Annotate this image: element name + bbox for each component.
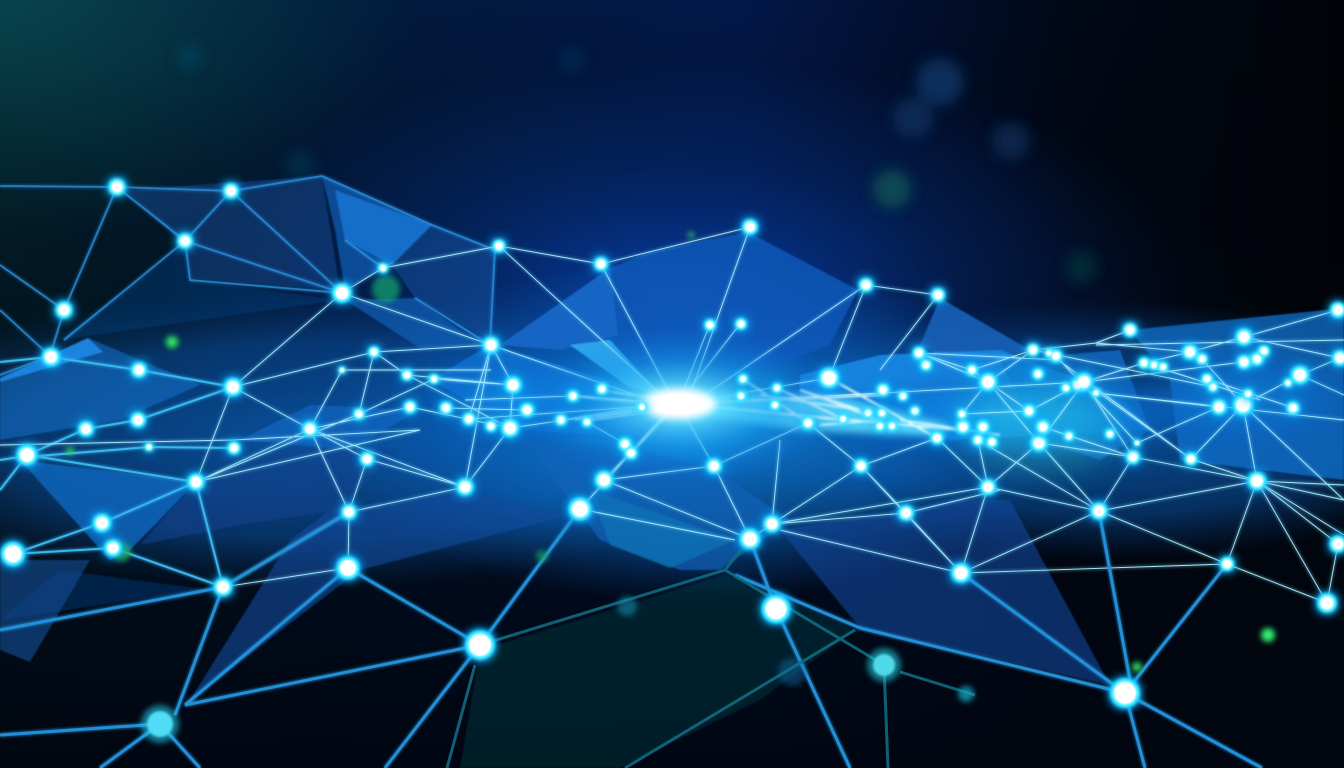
network nodes: medium [45,182,1344,610]
horizontal light band [410,350,1344,470]
network lines: thin bright mesh [0,227,1344,603]
network lines: back upper left [0,176,495,375]
network lines: thick mid-left blue [0,357,234,587]
teal blurred nodes [141,596,974,743]
polygon planes: lower centre and right [460,440,1110,768]
polygon planes: centre [430,232,1344,480]
green accent lights [66,232,1275,672]
network nodes: large [4,286,1136,704]
polygon planes: upper left [60,176,495,348]
network nodes: small [146,265,1344,452]
network lines: thick foreground blue [0,509,1262,768]
network lines: bright streaks from central burst [573,378,1000,453]
network lines: teal foreground [447,539,975,768]
polygon planes: left band [0,338,570,700]
central light burst [510,324,850,484]
bokeh lights [178,45,1097,283]
